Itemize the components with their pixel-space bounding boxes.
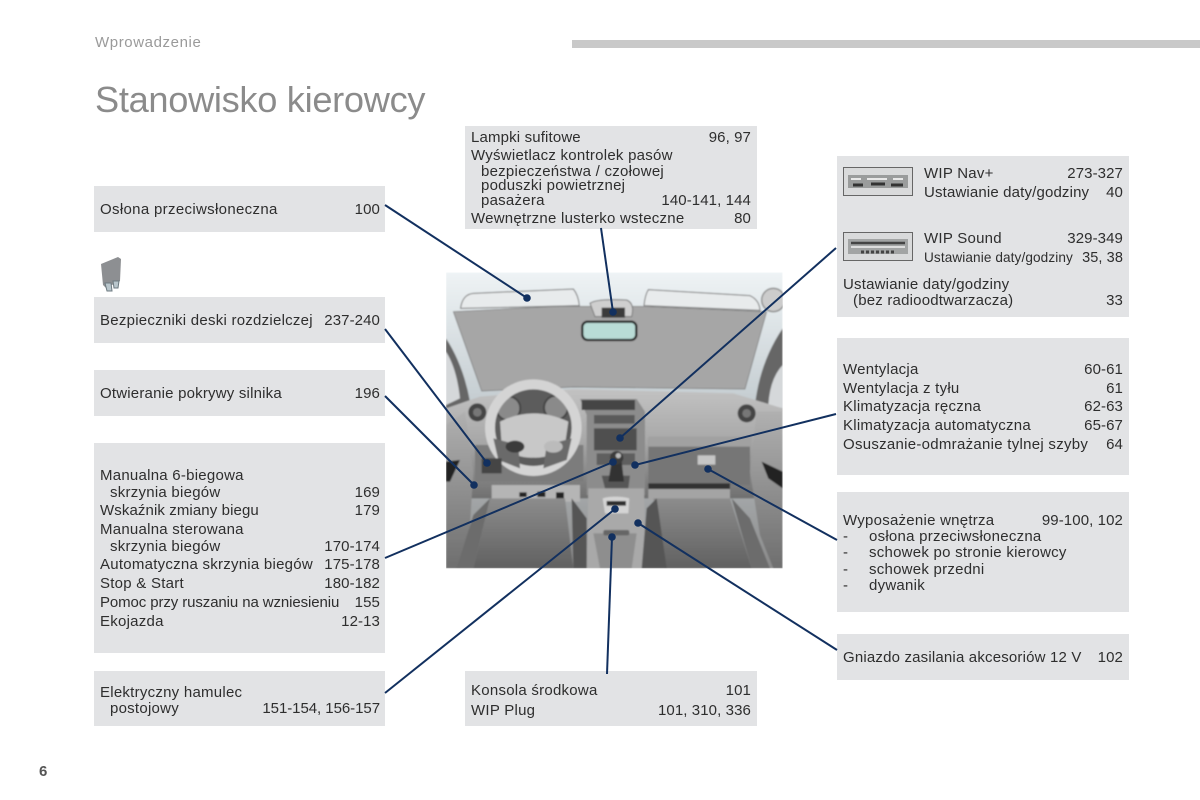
panel: gearbox: 180-182 xyxy=(324,575,380,592)
panel: console: Konsola środkowa xyxy=(471,682,598,699)
panel: bonnet: Otwieranie pokrywy silnika xyxy=(100,385,282,402)
mirror xyxy=(590,300,633,317)
panel: interior equipment: Wyposażenie wnętrza xyxy=(843,512,994,529)
panel: interior equipment: schowek po stronie kierowcy xyxy=(869,544,1067,561)
panel: sun visor xyxy=(94,186,385,232)
panel: gearbox: 175-178 xyxy=(324,556,380,573)
panel: 12 V socket xyxy=(837,634,1129,680)
panel: ceiling lights: 140-141, 144 xyxy=(661,192,751,209)
panel: fuses xyxy=(94,297,385,343)
section label: Wprowadzenie xyxy=(95,34,201,51)
panel: interior equipment: - xyxy=(843,544,848,561)
header bar xyxy=(572,40,1200,48)
panel: interior equipment: - xyxy=(843,528,848,545)
cockpit illustration xyxy=(446,272,783,568)
panel: audio: Ustawianie daty/godziny xyxy=(843,276,1009,293)
panel: audio: 329-349 xyxy=(1067,230,1123,247)
pedals and footwell xyxy=(492,485,580,502)
panel: gearbox: Pomoc przy ruszaniu na wzniesieniu xyxy=(100,594,339,611)
panel: console: WIP Plug xyxy=(471,702,535,719)
panel: gearbox: Manualna sterowana xyxy=(100,521,244,538)
gear lever xyxy=(602,476,630,488)
panel: bonnet xyxy=(94,370,385,416)
icon: WIP Sound radio xyxy=(843,232,913,261)
panel: ventilation: 64 xyxy=(1106,436,1123,453)
panel: ventilation: Wentylacja z tyłu xyxy=(843,380,960,397)
panel: ceiling lights: 96, 97 xyxy=(709,129,751,146)
panel: parking brake: Elektryczny hamulec xyxy=(100,684,242,701)
panel: ceiling lights: pasażera xyxy=(481,192,545,209)
panel: ceiling lights: Lampki sufitowe xyxy=(471,129,581,146)
panel: fuses: Bezpieczniki deski rozdzielczej xyxy=(100,312,313,329)
page number: 6 xyxy=(39,763,47,780)
sun visors xyxy=(461,289,579,308)
panel: parking brake xyxy=(94,671,385,726)
panel: 12 V socket: 102 xyxy=(1098,649,1123,666)
panel: ventilation xyxy=(837,338,1129,475)
icon: fuse xyxy=(101,257,121,292)
panel: audio: 33 xyxy=(1106,292,1123,309)
vents xyxy=(468,403,486,421)
panel: interior equipment: osłona przeciwsłoneczna xyxy=(869,528,1042,545)
panel: ventilation: 60-61 xyxy=(1084,361,1123,378)
panel: interior equipment: 99-100, 102 xyxy=(1042,512,1123,529)
panel: audio: 273-327 xyxy=(1067,165,1123,182)
panel: ventilation: Klimatyzacja ręczna xyxy=(843,398,981,415)
steering wheel xyxy=(494,388,572,466)
panel: audio: 40 xyxy=(1106,184,1123,201)
dashboard xyxy=(446,389,783,498)
panel: ceiling lights: poduszki powietrznej xyxy=(481,177,625,194)
panel: 12 V socket: Gniazdo zasilania akcesoriów 12 V xyxy=(843,649,1082,666)
windscreen xyxy=(453,306,767,391)
panel: ceiling lights: Wewnętrzne lusterko wsteczne xyxy=(471,210,684,227)
icon: WIP Nav radio xyxy=(843,167,913,196)
panel: audio xyxy=(837,156,1129,317)
panel: console: 101 xyxy=(726,682,751,699)
panel: gearbox: Wskaźnik zmiany biegu xyxy=(100,502,259,519)
panel: ceiling lights: bezpieczeństwa / czołowej xyxy=(481,163,664,180)
panel: ventilation: 65-67 xyxy=(1084,417,1123,434)
panel: sun visor: Osłona przeciwsłoneczna xyxy=(100,201,278,218)
console xyxy=(587,488,646,568)
panel: gearbox: skrzynia biegów xyxy=(110,538,220,555)
panel: ceiling lights: Wyświetlacz kontrolek pasów xyxy=(471,147,673,164)
panel: ceiling lights xyxy=(465,126,757,229)
panel: gearbox: 155 xyxy=(355,594,380,611)
panel: parking brake: 151-154, 156-157 xyxy=(262,700,380,717)
title: Stanowisko kierowcy xyxy=(95,79,425,120)
seats xyxy=(473,498,573,568)
panel: interior equipment xyxy=(837,492,1129,612)
panel: parking brake: postojowy xyxy=(110,700,179,717)
panel: audio: WIP Sound xyxy=(924,230,1002,247)
side doors xyxy=(446,464,473,568)
panel: gearbox: 179 xyxy=(355,502,380,519)
panel: ventilation: 61 xyxy=(1106,380,1123,397)
panel: audio: WIP Nav+ xyxy=(924,165,994,182)
centre stack xyxy=(580,399,645,495)
panel: gearbox: 12-13 xyxy=(341,613,380,630)
panel: gearbox: 169 xyxy=(355,484,380,501)
panel: gearbox xyxy=(94,443,385,653)
panel: gearbox: Manualna 6-biegowa xyxy=(100,467,244,484)
panel: gearbox: Automatyczna skrzynia biegów xyxy=(100,556,313,573)
panel: interior equipment: - xyxy=(843,561,848,578)
panel: gearbox: 170-174 xyxy=(324,538,380,555)
panel: fuses: 237-240 xyxy=(324,312,380,329)
panel: bonnet: 196 xyxy=(355,385,380,402)
panel: audio: (bez radioodtwarzacza) xyxy=(853,292,1013,309)
panel: sun visor: 100 xyxy=(355,201,380,218)
panel: ceiling lights: 80 xyxy=(734,210,751,227)
panel: ventilation: Klimatyzacja automatyczna xyxy=(843,417,1031,434)
panel: interior equipment: dywanik xyxy=(869,577,925,594)
panel: audio: Ustawianie daty/godziny xyxy=(924,184,1089,201)
panel: gearbox: skrzynia biegów xyxy=(110,484,220,501)
panel: console xyxy=(465,671,757,726)
panel: interior equipment: schowek przedni xyxy=(869,561,984,578)
panel: ventilation: Wentylacja xyxy=(843,361,919,378)
panel: audio: Ustawianie daty/godziny xyxy=(924,250,1073,265)
panel: interior equipment: - xyxy=(843,577,848,594)
panel: audio: 35, 38 xyxy=(1082,250,1123,266)
panel: gearbox: Ekojazda xyxy=(100,613,164,630)
panel: ventilation: 62-63 xyxy=(1084,398,1123,415)
panel: gearbox: Stop & Start xyxy=(100,575,184,592)
panel: ventilation: Osuszanie-odmrażanie tylnej szyby xyxy=(843,436,1088,453)
panel: console: 101, 310, 336 xyxy=(658,702,751,719)
